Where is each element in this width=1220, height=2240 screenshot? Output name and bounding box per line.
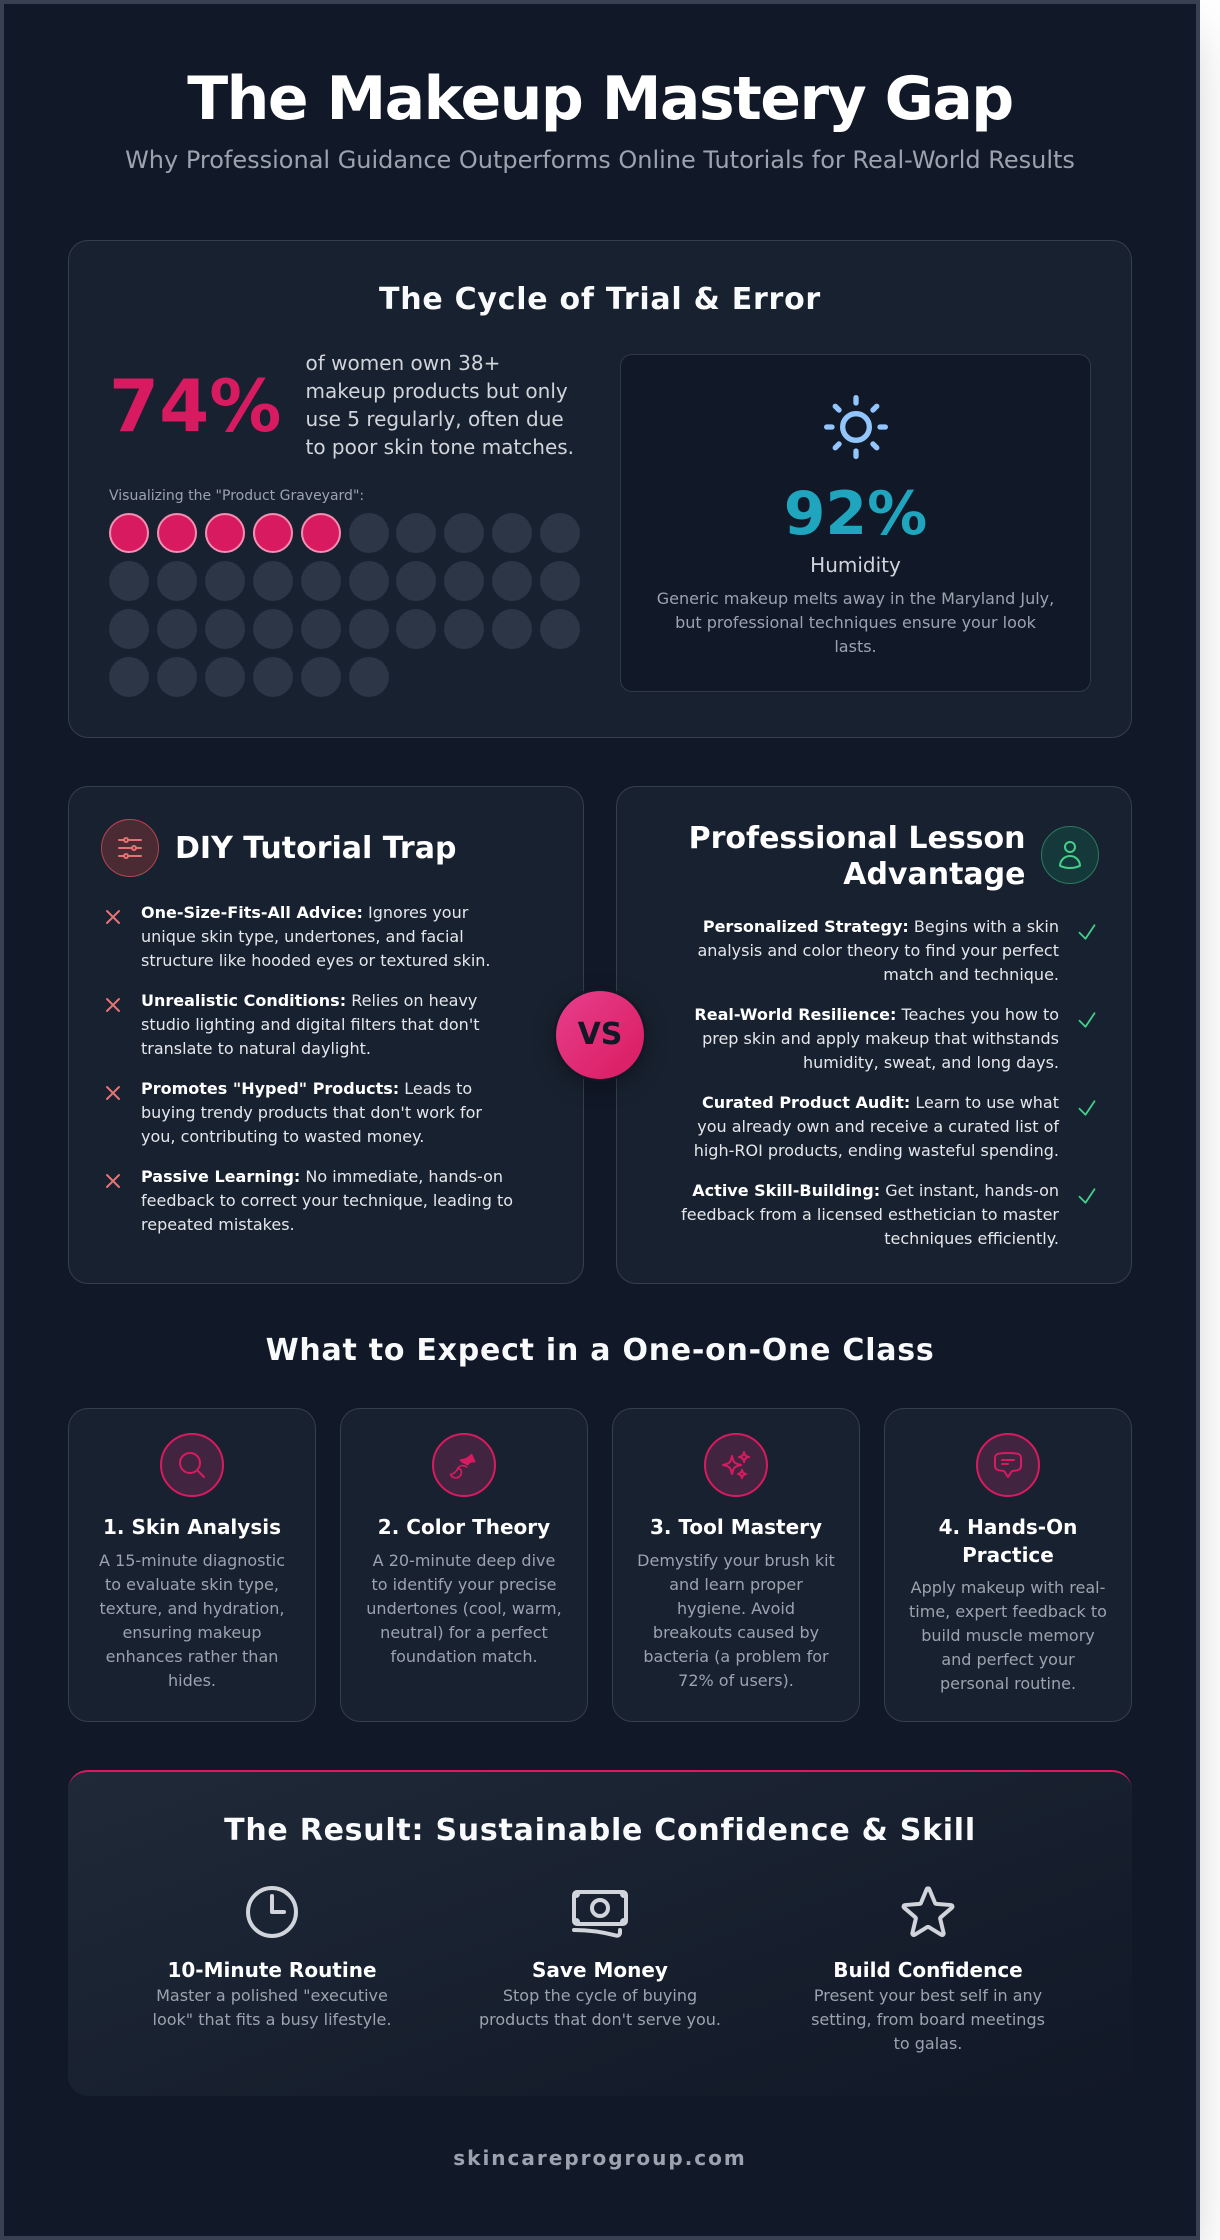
footer: website: skincareprogroup.com [453, 2146, 747, 2170]
text: color theory: foundation match. [390, 1647, 538, 1666]
item: hyped products [106, 1079, 482, 1146]
text: hands-on practice: and perfect your [941, 1650, 1075, 1669]
item: passive learning: repeated mistakes. [141, 1215, 295, 1234]
text: hands-on practice: build muscle memory [921, 1626, 1095, 1645]
text: build confidence: Present your best self in any [814, 1986, 1042, 2005]
item: active skill-building: feedback from a licensed esthetician to master [681, 1205, 1059, 1224]
item: one size fits all: structure like hooded eyes or textured skin. [141, 951, 491, 970]
text: humidity description: Generic makeup melts away in the Maryland July, [657, 589, 1054, 608]
item: personalized strategy [697, 917, 1096, 984]
heading: cycle: The Cycle of Trial & Error [379, 282, 821, 317]
text: humidity description [657, 589, 1054, 656]
column: save money [479, 1890, 721, 2029]
text: color theory: neutral) for a perfect [380, 1623, 548, 1642]
title: build confidence: Build Confidence [833, 1958, 1023, 1982]
title: color theory: 2. Color Theory [378, 1514, 550, 1538]
text: skin analysis: to evaluate skin type, [105, 1575, 279, 1594]
text: tool mastery: Demystify your brush kit [637, 1551, 835, 1570]
text: stat description: use 5 regularly, often due [306, 407, 564, 431]
text: tool mastery: bacteria (a problem for [643, 1647, 829, 1666]
card: tool mastery [612, 1408, 860, 1722]
panel: the result [68, 1770, 1132, 2096]
item: hyped products: buying trendy products that don't work for [141, 1103, 482, 1122]
text: skin analysis: hides. [168, 1671, 216, 1690]
text: save money: products that don't serve you. [479, 2010, 721, 2029]
item: personalized strategy: Personalized Strategy: Begins with a skin [703, 917, 1059, 936]
item: active skill-building [681, 1181, 1096, 1248]
text: color theory [366, 1551, 562, 1666]
icon: magnifier [160, 1433, 224, 1497]
text: skin analysis: ensuring makeup [122, 1623, 262, 1642]
text: tool mastery: breakouts caused by [653, 1623, 819, 1642]
text: color theory: to identify your precise [371, 1575, 557, 1594]
text: stat description: to poor skin tone matches. [306, 435, 574, 459]
icon: sparkles [704, 1433, 768, 1497]
text: humidity description: but professional techniques ensure your look [675, 613, 1036, 632]
item: unrealistic conditions: translate to natural daylight. [141, 1039, 371, 1058]
text: hands-on practice: personal routine. [940, 1674, 1076, 1693]
item: one size fits all: unique skin type, undertones, and facial [141, 927, 464, 946]
text: skin analysis [99, 1551, 285, 1690]
item: active skill-building: Active Skill-Building: Get instant, hands-on [692, 1181, 1059, 1200]
subtitle: Why Professional Guidance Outperforms Online Tutorials for Real-World Results [125, 146, 1075, 174]
item: personalized strategy: match and technique. [883, 965, 1059, 984]
panel: the cycle of trial and error [68, 240, 1132, 738]
item: passive learning: Passive Learning: No immediate, hands-on [141, 1167, 503, 1186]
title: hands-on practice [939, 1514, 1077, 1566]
item: curated product audit: Curated Product Audit: Learn to use what [702, 1093, 1059, 1112]
text: save money: Stop the cycle of buying [503, 1986, 697, 2005]
stat: 74 percent: 74% [109, 364, 281, 448]
column: 10-minute routine [152, 1886, 391, 2029]
heading: result: The Result: Sustainable Confidence & Skill [224, 1813, 976, 1848]
heading: professional: Professional Lesson [689, 821, 1026, 856]
card: color theory [340, 1408, 588, 1722]
item: real-world resilience: humidity, sweat, and long days. [803, 1053, 1059, 1072]
card: hands-on practice [884, 1408, 1132, 1722]
item: hyped products: Promotes "Hyped" Products: Leads to [141, 1079, 472, 1098]
text: build confidence: to galas. [894, 2034, 962, 2053]
icon: banknotes [572, 1890, 628, 1938]
text: hands-on practice [909, 1578, 1107, 1693]
text: hands-on practice: time, expert feedback to [909, 1602, 1107, 1621]
label: product graveyard: Visualizing the "Product Graveyard": [109, 488, 364, 504]
icon: clock [246, 1886, 298, 1938]
text: save money [479, 1986, 721, 2029]
text: build confidence: setting, from board meetings [811, 2010, 1045, 2029]
badge: VS [556, 991, 644, 1079]
icon: sliders [101, 819, 159, 877]
item: active skill-building: techniques efficiently. [884, 1229, 1059, 1248]
item: one size fits all [106, 903, 491, 970]
title: The Makeup Mastery Gap [187, 64, 1013, 134]
title: hands-on practice: Practice [962, 1542, 1054, 1566]
heading: DIY: DIY Tutorial Trap [175, 831, 456, 866]
text: stat description: of women own 38+ [306, 351, 500, 375]
item: unrealistic conditions: Unrealistic Conditions: Relies on heavy [141, 991, 477, 1010]
item: curated product audit: high-ROI products, ending wasteful spending. [694, 1141, 1059, 1160]
item: one size fits all: One-Size-Fits-All Advice: Ignores your [141, 903, 468, 922]
icon: chat bubble [976, 1433, 1040, 1497]
text: tool mastery: and learn proper [669, 1575, 803, 1594]
icon: user [1041, 826, 1099, 884]
text: stat description [306, 351, 574, 459]
text: stat description: makeup products but only [306, 379, 568, 403]
text: skin analysis: texture, and hydration, [99, 1599, 285, 1618]
text: color theory: A 20-minute deep dive [373, 1551, 555, 1570]
text: skin analysis: A 15-minute diagnostic [99, 1551, 285, 1570]
panel: DIY tutorial trap [68, 786, 584, 1284]
text: skin analysis: enhances rather than [106, 1647, 278, 1666]
badge: VS: VS [578, 1017, 622, 1052]
chart: dot grid of products [109, 513, 580, 697]
text: humidity description: lasts. [834, 637, 877, 656]
text: tool mastery: 72% of users). [678, 1671, 794, 1690]
item: curated product audit [694, 1093, 1096, 1160]
panel: professional lesson advantage [616, 786, 1132, 1284]
title: hands-on practice: 4. Hands-On [939, 1514, 1077, 1538]
label: humidity: Humidity [810, 553, 901, 577]
text: routine: Master a polished "executive [156, 1986, 388, 2005]
title: skin analysis: 1. Skin Analysis [103, 1514, 281, 1538]
item: curated product audit: you already own and receive a curated list of [697, 1117, 1059, 1136]
heading: professional: Advantage [843, 857, 1026, 892]
item: passive learning: feedback to correct your technique, leading to [141, 1191, 513, 1210]
icon: star [902, 1886, 954, 1937]
item: hyped products: you, contributing to wasted money. [141, 1127, 424, 1146]
panel: humidity [620, 354, 1091, 692]
card: skin analysis [68, 1408, 316, 1722]
heading: professional [689, 821, 1026, 892]
item: unrealistic conditions [106, 991, 480, 1058]
text: build confidence [811, 1986, 1045, 2053]
item: real-world resilience [694, 1005, 1096, 1072]
title: routine: 10-Minute Routine [167, 1958, 377, 1982]
item: unrealistic conditions: studio lighting and digital filters that don't [141, 1015, 480, 1034]
title: tool mastery: 3. Tool Mastery [650, 1514, 822, 1538]
item: passive learning [106, 1167, 513, 1234]
item: personalized strategy: analysis and color theory to find your perfect [697, 941, 1059, 960]
icon: paint brush [432, 1433, 496, 1497]
text: routine [152, 1986, 391, 2029]
text: color theory: undertones (cool, warm, [366, 1599, 562, 1618]
title: save money: Save Money [532, 1958, 668, 1982]
text: tool mastery: hygiene. Avoid [677, 1599, 795, 1618]
text: routine: look" that fits a busy lifestyle. [152, 2010, 391, 2029]
heading: what to expect: What to Expect in a One-on-One Class [266, 1332, 934, 1368]
icon: sun [824, 395, 888, 459]
item: real-world resilience: prep skin and apply makeup that withstands [702, 1029, 1059, 1048]
text: hands-on practice: Apply makeup with real- [911, 1578, 1105, 1597]
text: tool mastery [637, 1551, 835, 1690]
column: build confidence [811, 1886, 1045, 2053]
stat: 92 percent: 92% [784, 479, 927, 549]
item: real-world resilience: Real-World Resilience: Teaches you how to [694, 1005, 1059, 1024]
